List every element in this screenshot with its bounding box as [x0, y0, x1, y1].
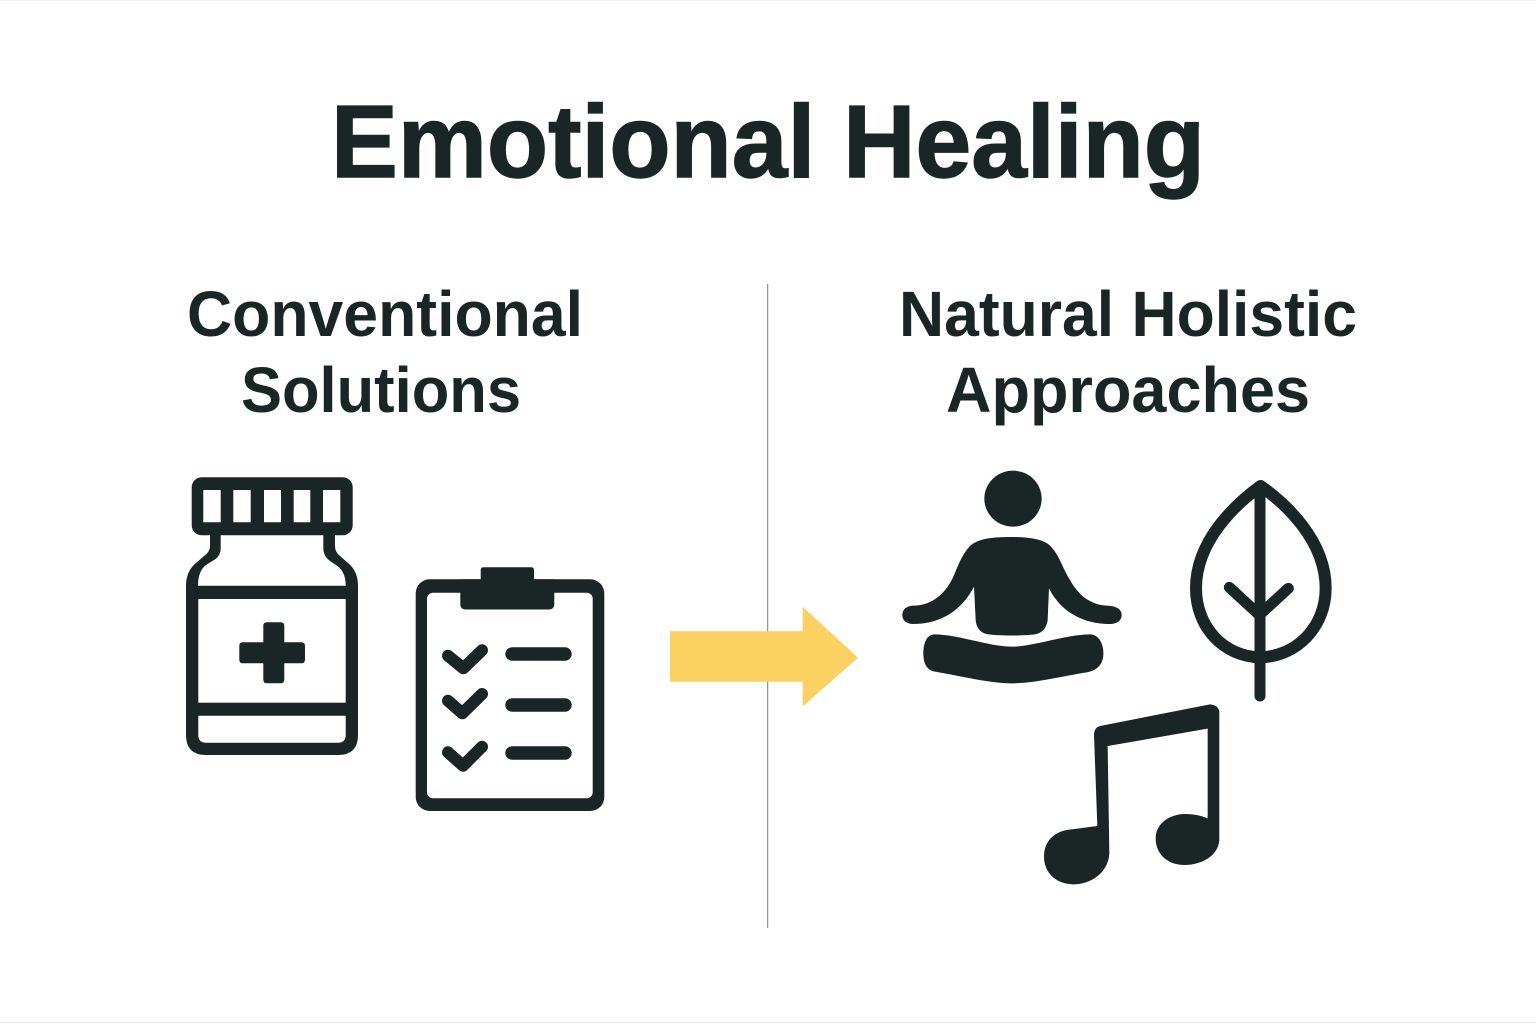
arrow [670, 607, 858, 706]
heading: conventional solutions: Solutions [241, 354, 521, 426]
title: Emotional Healing [331, 84, 1205, 199]
icon: clipboard checklist [416, 567, 604, 811]
icon: medicine bottle [186, 477, 358, 755]
heading: natural holistic approaches [899, 278, 1357, 426]
heading: natural holistic approaches: Natural Holistic [899, 278, 1357, 350]
icon: leaf [1196, 486, 1326, 696]
icon: music note [1044, 704, 1219, 884]
heading: conventional solutions [187, 278, 583, 426]
icon: meditating person [902, 471, 1122, 683]
heading: natural holistic approaches: Approaches [946, 354, 1310, 426]
heading: conventional solutions: Conventional [187, 278, 583, 350]
